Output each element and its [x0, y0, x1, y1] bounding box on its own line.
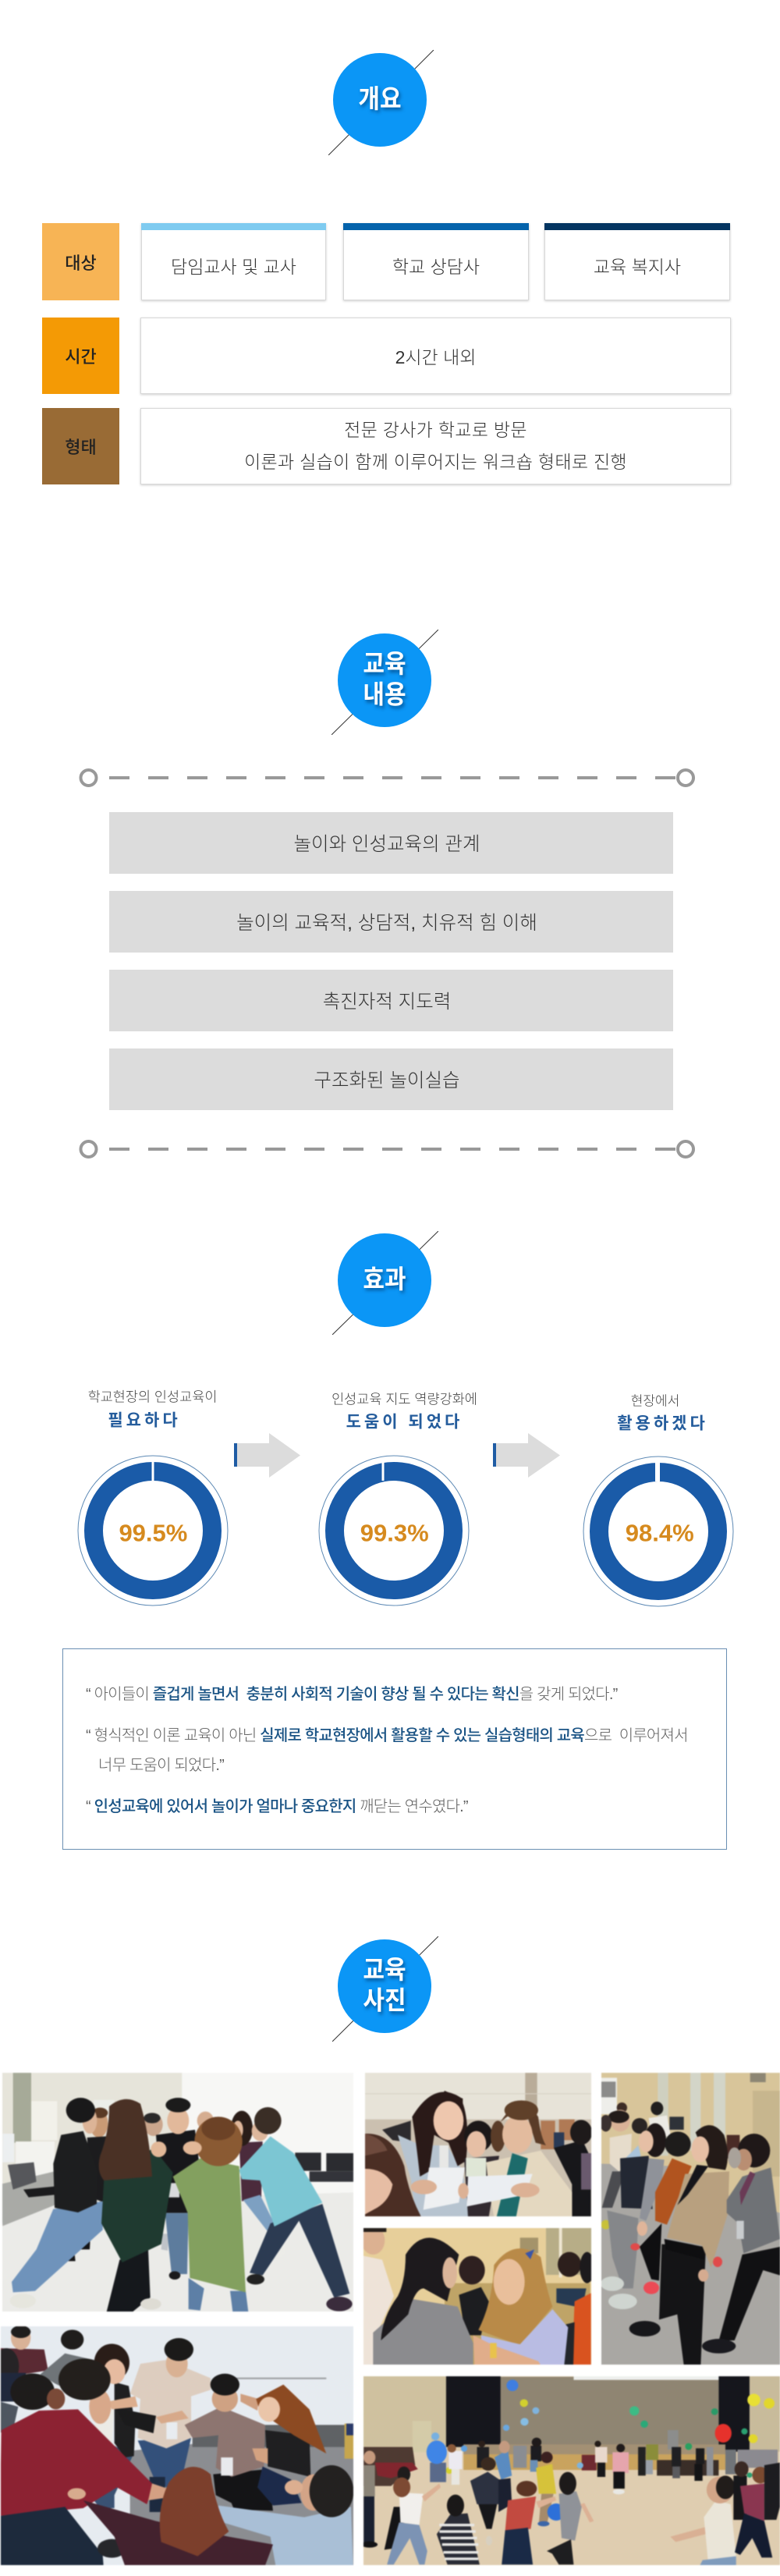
- quote 1: “ 아이들이 즐겁게 놀면서 충분히 사회적 기술이 향상 될 수 있다는 확신을 갖게 되었다.”: [86, 1686, 617, 1703]
- heading: 교육 내용: 교육: [363, 650, 406, 678]
- label: format: 형태: [65, 438, 97, 457]
- stat: will apply 98.4%: [583, 1393, 733, 1607]
- value: 99.3%: [360, 1520, 429, 1546]
- card: format description: 이론과 실습이 함께 이루어지는 워크숍 형태로 진행: [244, 452, 627, 472]
- heading: 개요: 개요: [358, 85, 402, 114]
- section: training photos: [0, 1936, 780, 2566]
- section: effects: [62, 1231, 733, 1850]
- arrow: [493, 1433, 560, 1478]
- caption: 현장에서: [631, 1393, 679, 1409]
- item: play and character education: 놀이와 인성교육의 관계: [293, 834, 480, 855]
- item: structured play practice: [109, 1048, 673, 1110]
- item: power of play: [109, 891, 673, 953]
- emphasis text: 활용하겠다: [617, 1415, 708, 1432]
- photo: balloons in the hall: [363, 2376, 780, 2565]
- label: time: 시간: [65, 347, 97, 367]
- quote 2: “ 형식적인 이론 교육이 아닌 실제로 학교현장에서 활용할 수 있는 실습형태의 교육으로 이루어져서: [86, 1727, 688, 1744]
- heading: 효과: 효과: [363, 1265, 406, 1294]
- heading: 효과: [332, 1231, 438, 1335]
- donut chart: [78, 1456, 228, 1606]
- label: format: [42, 408, 119, 484]
- section: course content: [80, 630, 695, 1158]
- card: school counselors: [343, 223, 529, 300]
- caption: 인성교육 지도 역량강화에: [332, 1391, 477, 1407]
- label: target audience: 대상: [65, 253, 97, 273]
- label: target audience: [42, 223, 119, 300]
- quote 3: “ 인성교육에 있어서 놀이가 얼마나 중요한지 깨닫는 연수였다.”: [86, 1798, 468, 1815]
- section: overview: [42, 50, 732, 487]
- card: duration: 2시간 내외: [395, 347, 476, 367]
- value: 99.5%: [119, 1520, 187, 1546]
- dashed divider: bottom: [80, 1140, 695, 1158]
- emphasis text: 도움이 되었다: [346, 1414, 463, 1431]
- heading: 교육 사진: [332, 1936, 438, 2042]
- item: facilitative leadership: 촉진자적 지도력: [323, 992, 451, 1013]
- heading: 개요: [328, 50, 434, 155]
- photo: group in a circle holding hands: [1, 2326, 353, 2565]
- heading: 교육 내용: 내용: [363, 681, 406, 709]
- card: duration: [140, 318, 731, 394]
- people near: [363, 2465, 375, 2496]
- heading: 교육 사진: 사진: [363, 1987, 406, 2015]
- people far: [430, 2463, 446, 2482]
- card: education social workers: 교육 복지사: [594, 256, 681, 276]
- label: time: [42, 318, 119, 394]
- value: 98.4%: [626, 1520, 694, 1546]
- item: structured play practice: 구조화된 놀이실습: [314, 1070, 460, 1091]
- item: facilitative leadership: [109, 970, 673, 1031]
- item: power of play: 놀이의 교육적, 상담적, 치유적 힘 이해: [236, 913, 537, 934]
- card: education social workers: [544, 223, 730, 300]
- panel: participant quotes: [62, 1648, 727, 1850]
- card: format description: 전문 강사가 학교로 방문: [344, 420, 527, 440]
- donut chart: [318, 1456, 470, 1606]
- caption: 학교현장의 인성교육이: [88, 1389, 217, 1404]
- heading: 교육 사진: 교육: [363, 1957, 406, 1985]
- emphasis text: 필요하다: [108, 1411, 181, 1429]
- card: format description: [140, 408, 731, 484]
- card: school counselors: 학교 상담사: [392, 256, 480, 276]
- card: homeroom teachers: 담임교사 및 교사: [171, 256, 296, 276]
- photo: women reading papers: [365, 2073, 591, 2216]
- photo: women walking in line: [601, 2073, 780, 2365]
- photo: group pushing in a circle: [2, 2073, 353, 2312]
- card: homeroom teachers: [141, 223, 326, 300]
- donut chart: [583, 1456, 733, 1607]
- stat: helped 99.3%: [318, 1391, 477, 1606]
- quote 2 continued: 너무 도움이 되었다.”: [98, 1757, 224, 1774]
- stat: needed 99.5%: [78, 1389, 228, 1606]
- heading: 교육 내용: [332, 630, 438, 735]
- balloons: [431, 2379, 775, 2478]
- dashed divider: top: [80, 768, 695, 787]
- item: play and character education: [109, 812, 673, 874]
- photo: two women talking: [363, 2228, 591, 2365]
- arrow: [234, 1433, 300, 1478]
